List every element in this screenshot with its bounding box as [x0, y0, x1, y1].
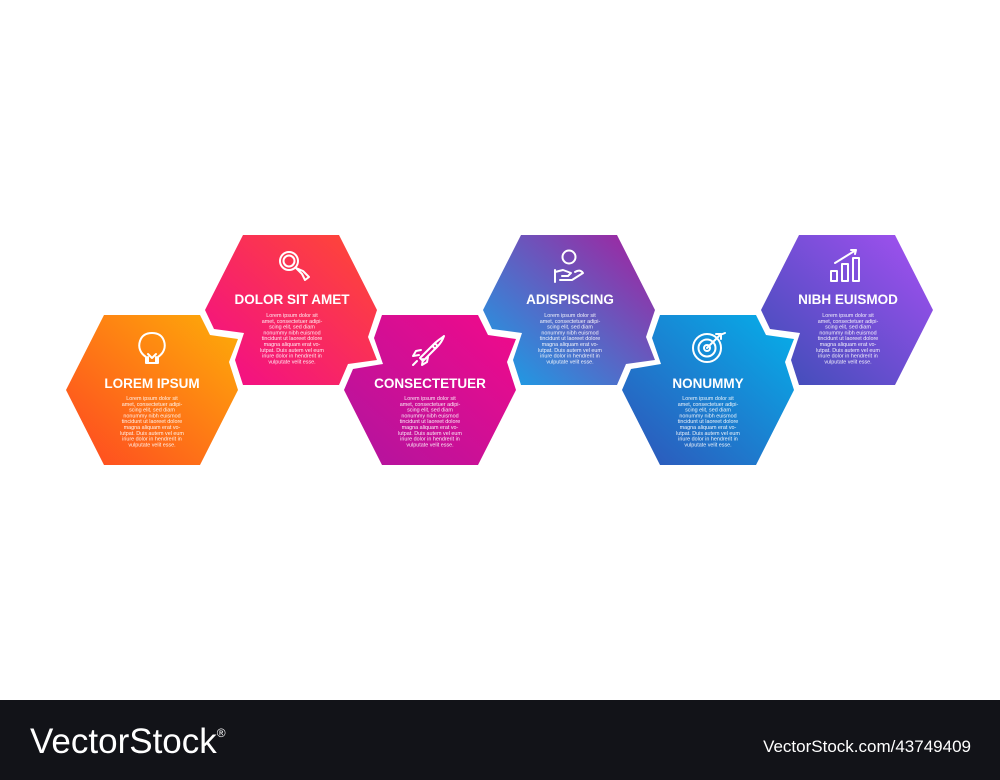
step 2: dolor sit amet: nonummy nibh euismod — [263, 330, 321, 336]
footer logo: VectorStock — [30, 722, 217, 761]
step 6: nibh euismod: amet, consectetuer adipi- — [818, 319, 878, 325]
step 6: nibh euismod: scing elit, sed diam — [825, 325, 871, 331]
step 1: lorem ipsum: Lorem ipsum dolor sit — [126, 396, 178, 402]
step 1: lorem ipsum: amet, consectetuer adipi- — [122, 402, 182, 408]
step 4: adispiscing: iriure dolor in hendrerit in — [540, 354, 600, 360]
icon: target — [693, 333, 725, 362]
step 2: dolor sit amet: vulputate velit esse. — [268, 359, 316, 365]
step 1: lorem ipsum — [66, 315, 238, 465]
step 3: consectetuer: Lorem ipsum dolor sit — [404, 396, 456, 402]
icon: bar chart growth — [831, 250, 859, 281]
step 3: consectetuer: magna aliquam erat vo- — [402, 425, 459, 431]
step 4: adispiscing: vulputate velit esse. — [546, 359, 594, 365]
icon: light bulb — [139, 333, 165, 363]
step 1: lorem ipsum: scing elit, sed diam — [129, 408, 175, 414]
step 5: nonummy: magna aliquam erat vo- — [680, 425, 737, 431]
step 3: consectetuer: amet, consectetuer adipi- — [400, 402, 460, 408]
footer url: VectorStock.com/43749409 — [763, 737, 971, 756]
step 3: consectetuer: iriure dolor in hendrerit in — [400, 437, 460, 443]
step 3: consectetuer — [344, 315, 516, 465]
step 2: dolor sit amet: iriure dolor in hendrerit in — [262, 354, 322, 360]
step 4: adispiscing: amet, consectetuer adipi- — [540, 319, 600, 325]
step 2: dolor sit amet: DOLOR SIT AMET — [234, 292, 350, 307]
step 1: lorem ipsum: LOREM IPSUM — [104, 376, 200, 391]
step 6: nibh euismod: lutpat. Duis autem vel eum — [816, 348, 880, 354]
step 1: lorem ipsum: iriure dolor in hendrerit in — [122, 437, 182, 443]
step 1: lorem ipsum: magna aliquam erat vo- — [124, 425, 181, 431]
step 5: nonummy: iriure dolor in hendrerit in — [678, 437, 738, 443]
step 2: dolor sit amet: amet, consectetuer adipi- — [262, 319, 322, 325]
step 2: dolor sit amet: lutpat. Duis autem vel eum — [260, 348, 324, 354]
step 6: nibh euismod: nonummy nibh euismod — [819, 330, 877, 336]
step 1: lorem ipsum: nonummy nibh euismod — [123, 413, 181, 419]
step 3: consectetuer: CONSECTETUER — [374, 376, 486, 391]
step 5: nonummy: scing elit, sed diam — [685, 408, 731, 414]
step 3: consectetuer: tincidunt ut laoreet dolore — [400, 419, 460, 425]
step 4: adispiscing: magna aliquam erat vo- — [542, 342, 599, 348]
step 2: dolor sit amet: magna aliquam erat vo- — [264, 342, 321, 348]
step 5: nonummy: vulputate velit esse. — [684, 442, 732, 448]
step 3: consectetuer: lutpat. Duis autem vel eum — [398, 431, 462, 437]
step 4: adispiscing: lutpat. Duis autem vel eum — [538, 348, 602, 354]
step 4: adispiscing: nonummy nibh euismod — [541, 330, 599, 336]
step 5: nonummy: tincidunt ut laoreet dolore — [678, 419, 738, 425]
icon: hand with coin — [555, 250, 583, 282]
step 6: nibh euismod: NIBH EUISMOD — [798, 292, 898, 307]
icon: rocket — [413, 336, 444, 365]
step 5: nonummy: Lorem ipsum dolor sit — [682, 396, 734, 402]
step 6: nibh euismod: Lorem ipsum dolor sit — [822, 313, 874, 319]
step 2: dolor sit amet: Lorem ipsum dolor sit — [266, 313, 318, 319]
step 2: dolor sit amet: tincidunt ut laoreet dolore — [262, 336, 322, 342]
step 2: dolor sit amet — [205, 235, 377, 385]
step 5: nonummy: amet, consectetuer adipi- — [678, 402, 738, 408]
step 4: adispiscing: tincidunt ut laoreet dolore — [540, 336, 600, 342]
step 4: adispiscing: scing elit, sed diam — [547, 325, 593, 331]
step 5: nonummy: lutpat. Duis autem vel eum — [676, 431, 740, 437]
step 3: consectetuer: nonummy nibh euismod — [401, 413, 459, 419]
step 5: nonummy — [622, 315, 794, 465]
step 6: nibh euismod — [761, 235, 933, 385]
footer bar — [0, 700, 1000, 780]
step 3: consectetuer: vulputate velit esse. — [406, 442, 454, 448]
step 3: consectetuer: scing elit, sed diam — [407, 408, 453, 414]
step 5: nonummy: NONUMMY — [672, 376, 744, 391]
step 6: nibh euismod: iriure dolor in hendrerit in — [818, 354, 878, 360]
step 1: lorem ipsum: tincidunt ut laoreet dolore — [122, 419, 182, 425]
footer logo: ® — [217, 726, 226, 740]
step 6: nibh euismod: magna aliquam erat vo- — [820, 342, 877, 348]
step 1: lorem ipsum: lutpat. Duis autem vel eum — [120, 431, 184, 437]
step 4: adispiscing: ADISPISCING — [526, 292, 614, 307]
step 4: adispiscing — [483, 235, 655, 385]
step 1: lorem ipsum: vulputate velit esse. — [128, 442, 176, 448]
step 6: nibh euismod: tincidunt ut laoreet dolore — [818, 336, 878, 342]
step 2: dolor sit amet: scing elit, sed diam — [269, 325, 315, 331]
step 4: adispiscing: Lorem ipsum dolor sit — [544, 313, 596, 319]
icon: magnifier — [280, 252, 309, 280]
step 6: nibh euismod: vulputate velit esse. — [824, 359, 872, 365]
step 5: nonummy: nonummy nibh euismod — [679, 413, 737, 419]
